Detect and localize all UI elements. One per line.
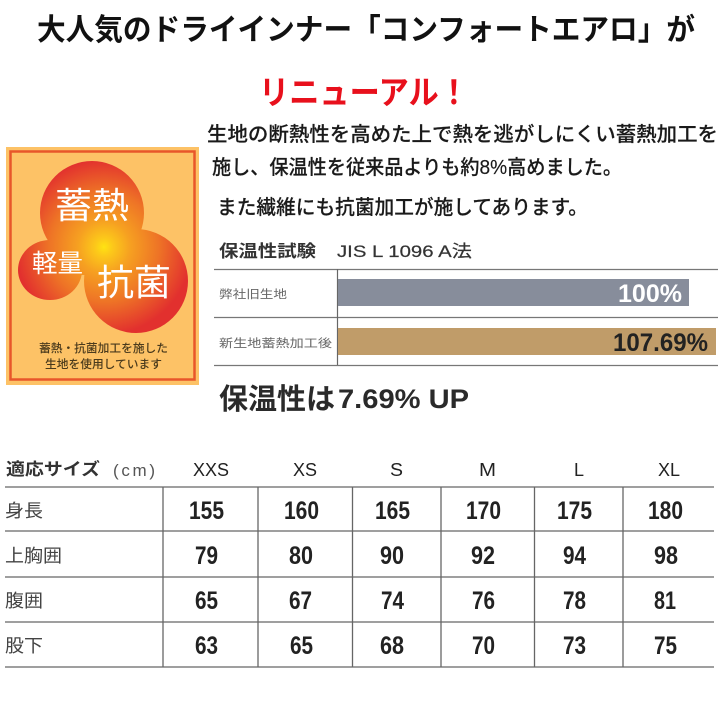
table: size chart [5, 459, 714, 667]
callout: 7.69% up: 保温性は [219, 383, 335, 416]
row: height [5, 497, 683, 525]
table header: M [479, 460, 496, 480]
bar: new fabric: 107.69% [613, 329, 708, 357]
badge caption [39, 341, 168, 371]
bar: old fabric: 弊社旧生地 [219, 287, 288, 301]
row: waist: 81 [654, 587, 676, 615]
row: upper chest: 上胸囲 [5, 546, 62, 566]
row: waist: 65 [195, 587, 218, 615]
table header: XL [658, 460, 680, 480]
row: height: 身長 [5, 501, 43, 521]
row: waist: 76 [472, 587, 495, 615]
row: height: 165 [375, 497, 410, 525]
row: inseam [5, 632, 677, 660]
row: waist: 78 [563, 587, 586, 615]
row: upper chest: 94 [563, 542, 586, 570]
row: inseam: 75 [654, 632, 677, 660]
chart: heat retention test [214, 242, 718, 366]
row: upper chest: 80 [289, 542, 313, 570]
label: antibacterial: 抗菌 [97, 262, 171, 303]
row: inseam: 65 [290, 632, 313, 660]
row: waist: 74 [381, 587, 404, 615]
callout: 7.69% up: 7.69% UP [338, 384, 469, 414]
text block: description [207, 123, 718, 219]
row: upper chest: 90 [380, 542, 404, 570]
bar: old fabric [219, 279, 689, 308]
row: upper chest [5, 542, 678, 570]
table header: XXS [193, 460, 229, 480]
row: upper chest: 92 [471, 542, 495, 570]
table header: XS [293, 460, 317, 480]
table header: (cm) [113, 461, 155, 480]
text block: description: 施し、保温性を従来品よりも約8%高めました。 [212, 156, 622, 179]
chart heading: JIS L 1096 A法 [337, 242, 472, 261]
label: lightweight: 軽量 [32, 250, 83, 278]
table header: 適応サイズ [6, 459, 100, 479]
row: height: 175 [557, 497, 592, 525]
title: 大人気のドライインナー「コンフォートエアロ」が [37, 13, 695, 47]
callout: 7.69% up [219, 383, 469, 416]
bar: new fabric [219, 328, 716, 357]
text block: description: また繊維にも抗菌加工が施してあります。 [217, 196, 588, 219]
table header: S [390, 460, 403, 480]
row: waist [5, 587, 676, 615]
row: height: 155 [189, 497, 224, 525]
row: inseam: 68 [380, 632, 404, 660]
row: inseam: 股下 [5, 636, 43, 656]
badge caption: 蓄熱・抗菌加工を施した [39, 341, 168, 355]
row: inseam: 70 [472, 632, 495, 660]
row: inseam: 63 [195, 632, 218, 660]
bar: old fabric: 100% [618, 280, 682, 308]
panel: feature badge [6, 147, 199, 385]
table header: L [574, 460, 584, 480]
label: heat storage: 蓄熱 [55, 185, 129, 226]
row: upper chest: 98 [654, 542, 678, 570]
row: inseam: 73 [563, 632, 586, 660]
row: height: 170 [466, 497, 501, 525]
icon: three overlapping circles [18, 161, 188, 333]
bar: new fabric: 新生地蓄熱加工後 [219, 336, 333, 350]
row: upper chest: 79 [195, 542, 218, 570]
row: height: 160 [284, 497, 319, 525]
badge caption: 生地を使用しています [45, 357, 162, 371]
table header [6, 459, 680, 480]
row: waist: 67 [289, 587, 312, 615]
row: waist: 腹囲 [5, 591, 43, 611]
chart heading [219, 242, 472, 261]
heading: renewal: リニューアル！ [259, 74, 469, 111]
chart heading: 保温性試験 [219, 242, 316, 261]
row: height: 180 [648, 497, 683, 525]
text block: description: 生地の断熱性を高めた上で熱を逃がしにくい蓄熱加工を [207, 123, 718, 146]
